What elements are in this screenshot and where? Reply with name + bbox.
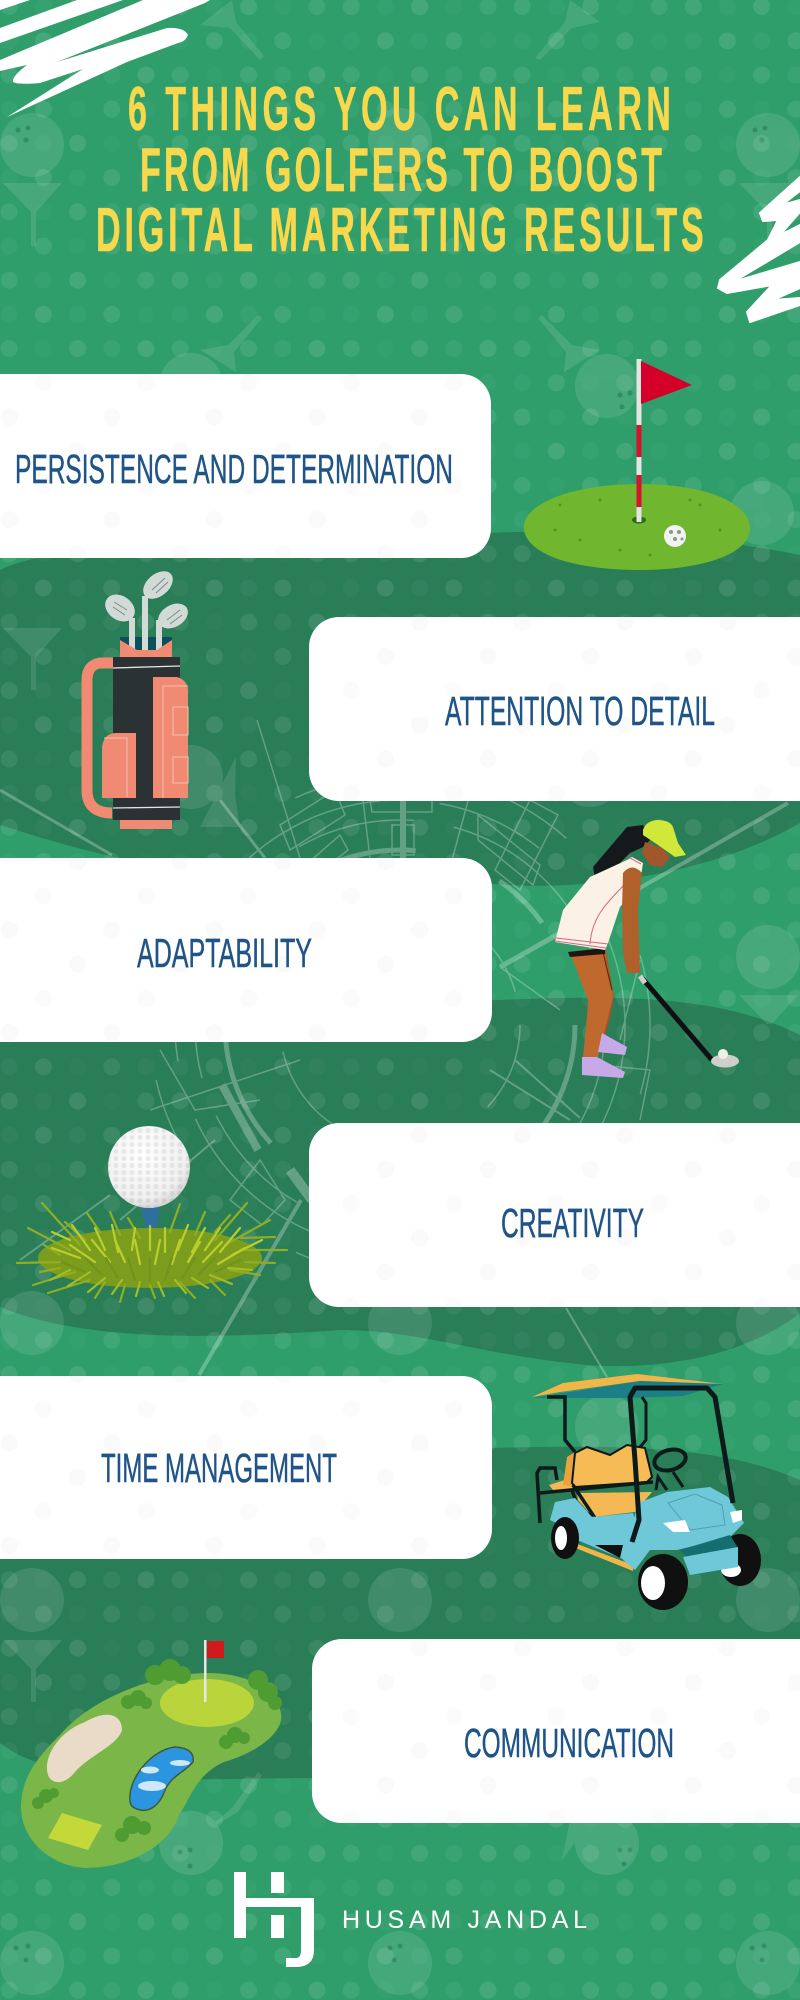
icon: golf ball on tee in grass	[17, 1126, 287, 1302]
label: creativity: CREATIVITY	[501, 1200, 644, 1246]
title	[96, 74, 704, 265]
panel: creativity	[309, 1123, 800, 1307]
panel: attention to detail	[309, 617, 800, 801]
icon: golf bag	[87, 566, 192, 829]
icon: golf cart	[532, 1374, 761, 1610]
title: 6 THINGS YOU CAN LEARN	[128, 74, 671, 144]
title: FROM GOLFERS TO BOOST	[140, 135, 662, 205]
label: adaptability: ADAPTABILITY	[137, 930, 312, 976]
label: persistence and determination: PERSISTENCE AND DETERMINATION	[15, 446, 453, 492]
panel: persistence and determination	[0, 374, 491, 558]
logo: Husam Jandal wordmark: HUSAM JANDAL	[342, 1906, 587, 1934]
icon: woman golfer	[555, 820, 739, 1078]
panel: adaptability	[0, 858, 492, 1042]
title: DIGITAL MARKETING RESULTS	[96, 195, 704, 265]
icon: putting green with flag	[524, 359, 750, 570]
icon: golf course map	[21, 1640, 282, 1868]
panel: communication	[312, 1639, 800, 1823]
scribble: top left	[0, 0, 210, 117]
scribble: top right	[718, 177, 800, 322]
label: time management: TIME MANAGEMENT	[101, 1445, 337, 1491]
panel: time management	[0, 1376, 492, 1559]
logo: HJ mark	[234, 1872, 314, 1967]
